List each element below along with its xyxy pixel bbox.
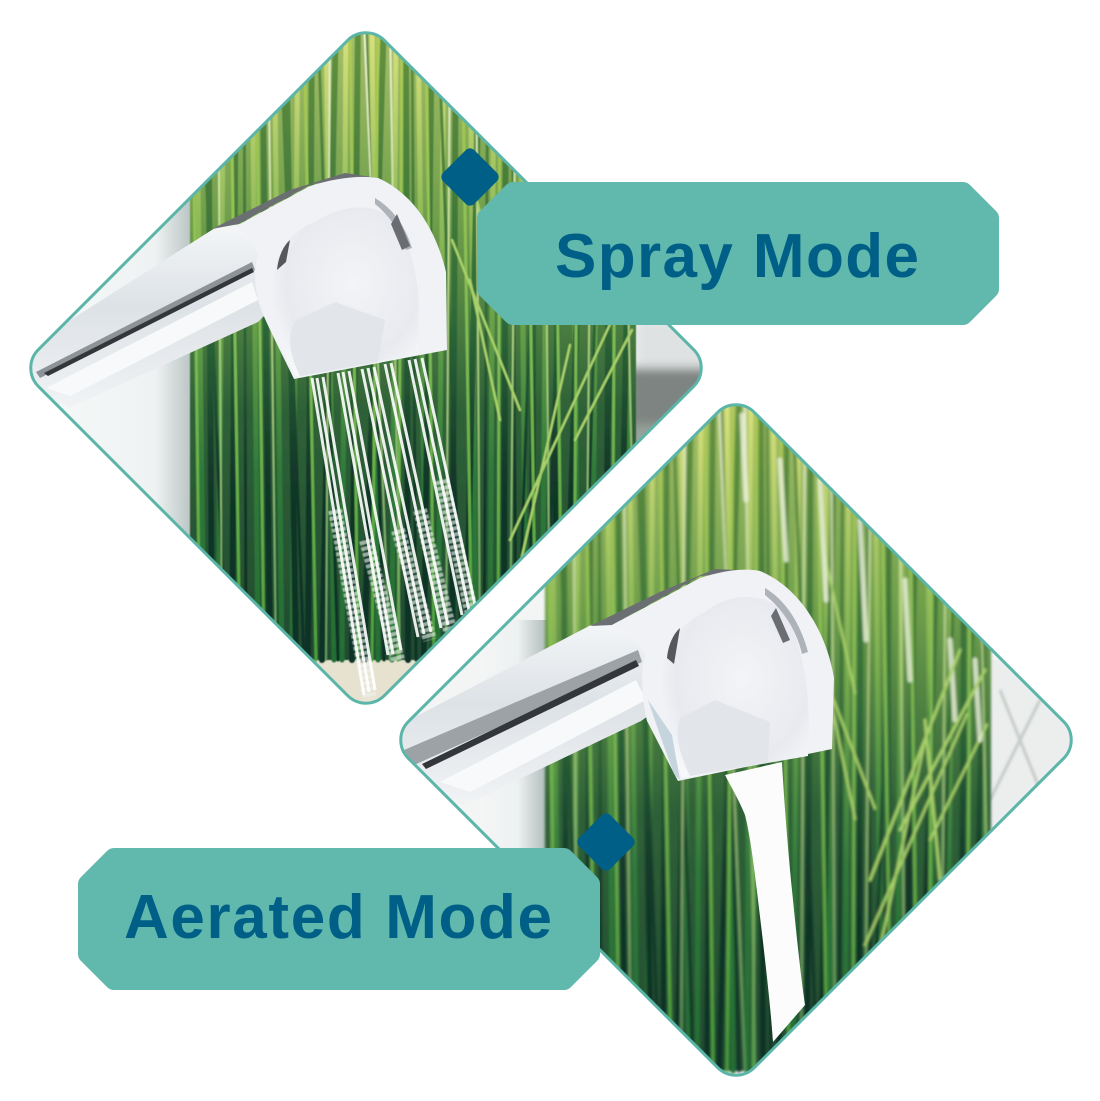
faucet arm reflection	[36, 262, 255, 378]
water streams: spray mode	[312, 358, 475, 700]
faucet face	[272, 207, 419, 376]
faucet: aerated photo	[402, 569, 834, 781]
water stream: aerated mode	[725, 762, 805, 1042]
photo background: window and wall	[416, 588, 1070, 1074]
faucet face	[741, 754, 808, 768]
panel: spray mode photo	[32, 34, 700, 702]
faucet arm	[32, 224, 264, 380]
faucet arm	[402, 620, 646, 778]
panel outline: aerated mode	[401, 405, 1071, 1075]
label: aerated mode	[78, 848, 600, 990]
faucet arm reflection	[404, 650, 642, 766]
heading: aerated mode: Aerated Mode	[124, 883, 552, 952]
icon: spray diamond marker	[439, 146, 501, 208]
label: spray mode	[477, 182, 999, 325]
icon: aerated diamond marker	[575, 811, 637, 873]
faucet reflections	[277, 240, 290, 270]
faucet reflections	[667, 628, 680, 664]
photo background: window and wall	[54, 200, 700, 702]
faucet head grey top strip	[212, 173, 378, 229]
faucet head grey top strip	[590, 569, 736, 626]
heading: spray mode: Spray Mode	[555, 222, 919, 291]
grass: aerated photo	[545, 399, 991, 1071]
faucet head	[612, 570, 834, 781]
grass: spray photo	[190, 20, 636, 660]
faucet: spray photo	[32, 173, 447, 380]
panel: aerated mode photo	[390, 390, 1090, 1090]
faucet head	[236, 177, 447, 379]
panel outline: spray mode	[31, 33, 701, 703]
